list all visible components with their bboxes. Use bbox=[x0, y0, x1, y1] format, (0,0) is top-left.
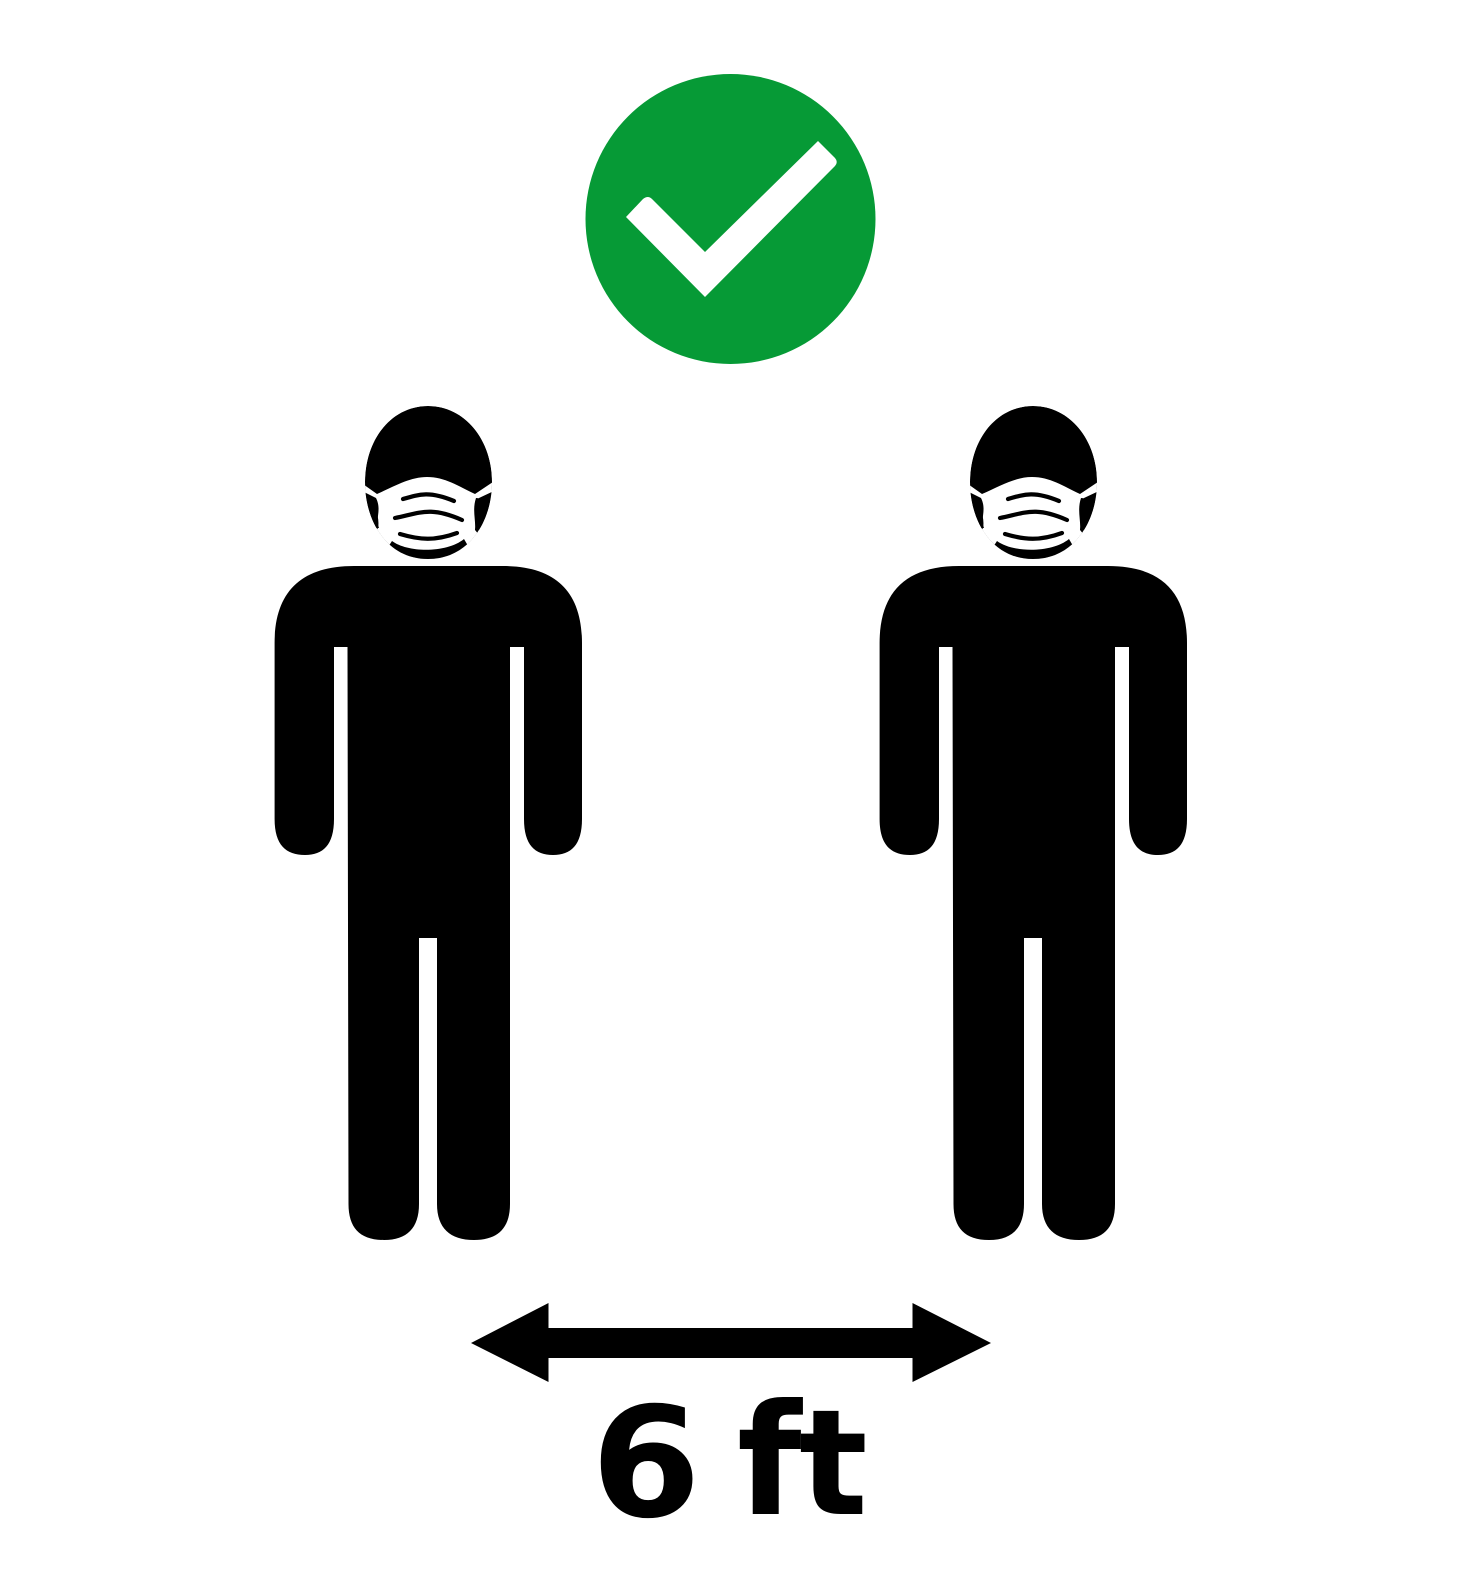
figure: right person wearing a mask bbox=[880, 406, 1187, 1240]
label: 6 ft distance: 6 bbox=[591, 1374, 701, 1552]
infographic canvas bbox=[274, 74, 1187, 1518]
label: 6 ft distance bbox=[591, 1371, 868, 1552]
label: 6 ft distance: f bbox=[737, 1371, 804, 1551]
figure: left person wearing a mask bbox=[275, 406, 582, 1240]
icon: green check mark badge bbox=[586, 74, 876, 364]
label: 6 ft distance: t bbox=[799, 1379, 868, 1549]
arrow: double-headed distance arrow bbox=[471, 1303, 991, 1382]
